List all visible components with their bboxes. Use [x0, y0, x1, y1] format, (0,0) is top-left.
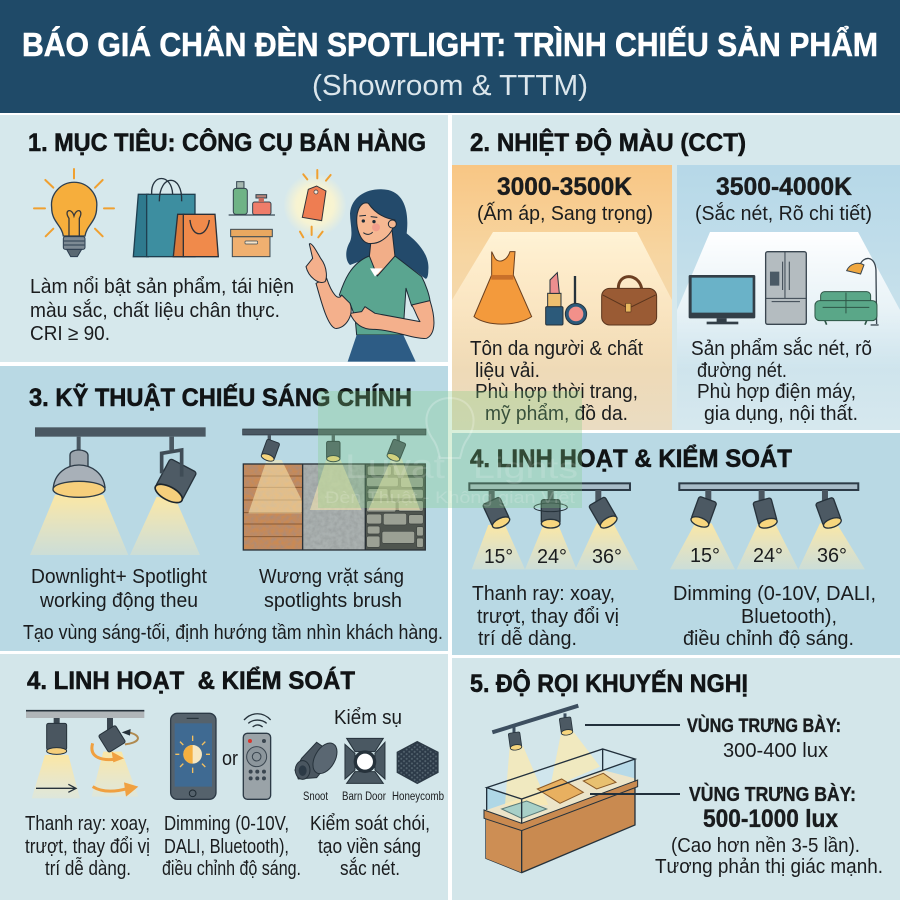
- beam angle labels: 15°: [484, 546, 513, 568]
- dimming text: [162, 813, 301, 880]
- cool description: [691, 337, 872, 425]
- glare control text: [310, 813, 430, 880]
- panel: 2 color temperature: [452, 115, 900, 430]
- panel: 1 goal: [0, 115, 448, 362]
- cool CCT label: [695, 173, 872, 225]
- goal description: CRI ≥ 90.: [30, 323, 110, 345]
- display zone label: 500-1000 lux: [703, 805, 838, 833]
- cool light cone: [677, 232, 900, 370]
- panel: 5 recommended illuminance: [452, 658, 900, 900]
- icon: honeycomb: [397, 742, 438, 783]
- warm CCT label: [477, 173, 653, 225]
- technique captions: spotlights brush: [264, 590, 402, 612]
- display zone label: Tương phản thị giác mạnh.: [655, 856, 883, 878]
- icons: TV, fridge, sofa and lamp: [689, 252, 879, 325]
- accessories heading: Kiểm sụ: [334, 707, 402, 729]
- display zone label: VÙNG TRƯNG BÀY:: [689, 782, 856, 806]
- warm description: Tôn da người & chất: [470, 338, 643, 360]
- icons: dress, lipstick, handbag: [474, 252, 657, 325]
- rail description: trí dễ dàng.: [478, 627, 577, 650]
- dimming text: Dimming (0-10V,: [164, 813, 289, 835]
- warm description: [470, 338, 643, 425]
- icon: light bulb: [34, 169, 114, 257]
- leader lines: [585, 725, 680, 794]
- icon: rail lamps with movement arrows: [26, 711, 144, 798]
- cool description: Sản phẩm sắc nét, rõ: [691, 337, 872, 360]
- general zone label: VÙNG TRƯNG BÀY:: [687, 715, 841, 737]
- dimming text: DALI, Bluetooth),: [164, 836, 289, 858]
- watermark: Đèn Thuật - Không gian Việt: [325, 488, 575, 507]
- technique captions: [31, 566, 404, 612]
- rail description: trượt, thay đổi vị: [477, 606, 619, 628]
- accessory labels: Snoot: [303, 791, 329, 803]
- accessory labels: Barn Door: [342, 791, 386, 803]
- goal description: [30, 276, 294, 345]
- accessory labels: [303, 791, 444, 803]
- glare control text: sắc nét.: [340, 857, 400, 880]
- heading 1: 1. MỤC TIÊU: CÔNG CỤ BÁN HÀNG: [28, 127, 426, 157]
- display zone label: [655, 782, 883, 878]
- or label: or: [222, 748, 238, 770]
- cool description: Phù hợp điện máy,: [697, 381, 856, 403]
- heading 5: 5. ĐỘ RỌI KHUYẾN NGHỊ: [470, 668, 748, 698]
- watermark: Luvat: [345, 448, 446, 486]
- glare control text: Kiểm soát chói,: [310, 813, 430, 835]
- technique captions: Wương vrặt sáng: [259, 566, 404, 588]
- dimming description: Dimming (0-10V, DALI,: [673, 583, 876, 605]
- icon: smartphone dimming: [171, 713, 216, 799]
- goal description: màu sắc, chất liệu chân thực.: [30, 299, 280, 322]
- icon: downlight and spotlight on rail: [30, 427, 206, 555]
- panel: 4 flexibility right: [452, 433, 900, 655]
- icon: snoot: [295, 739, 342, 779]
- beam angle labels: [484, 545, 847, 568]
- panel: 3 main lighting techniques: [0, 366, 448, 651]
- rail text: trượt, thay đổi vị: [25, 836, 150, 858]
- cool CCT label: 3500-4000K: [716, 173, 852, 201]
- warm description: mỹ phẩm, đồ da.: [485, 403, 628, 425]
- icon: rail spotlights right with beam angles: [670, 483, 865, 569]
- rail text: Thanh ray: xoay,: [25, 813, 150, 835]
- icon: woman pointing: [306, 189, 434, 362]
- beam angle labels: 36°: [592, 546, 622, 568]
- beam angle labels: 15°: [690, 545, 720, 567]
- warm light cone: [452, 232, 672, 370]
- technique captions: Downlight+ Spotlight: [31, 566, 207, 588]
- accessory labels: Honeycomb: [392, 791, 444, 803]
- cool description: gia dụng, nội thất.: [704, 403, 858, 425]
- dimming description: Bluetooth),: [741, 606, 837, 628]
- icon: shopping bags: [133, 178, 218, 257]
- rail description: Thanh ray: xoay,: [472, 583, 615, 605]
- beam angle labels: 36°: [817, 545, 847, 567]
- technique summary: Tạo vùng sáng-tối, định hướng tầm nhìn khách hàng.: [23, 622, 443, 644]
- icon: barn door: [345, 738, 385, 783]
- warm CCT label: 3000-3500K: [497, 173, 632, 201]
- icon: glowing price tag: [283, 170, 347, 237]
- watermark: Lights: [473, 452, 578, 485]
- icon: cosmetics on shelf and box: [229, 182, 275, 257]
- heading 3: 3. KỸ THUẬT CHIẾU SÁNG CHÍNH: [29, 382, 412, 412]
- glare control text: tạo viền sáng: [318, 836, 421, 858]
- technique captions: working động theu: [39, 590, 198, 612]
- heading 2: 2. NHIỆT ĐỘ MÀU (CCT): [470, 127, 746, 157]
- beam angle labels: 24°: [537, 546, 567, 568]
- icon: wall washing on wood, concrete and stone: [243, 429, 426, 550]
- icon: remote control: [243, 714, 271, 799]
- watermark: [318, 391, 582, 508]
- subtitle: (Showroom & TTTM): [312, 70, 588, 102]
- header banner: [0, 0, 900, 113]
- panel: 4 flexibility bottom: [0, 654, 448, 900]
- dimming description: điều chỉnh độ sáng.: [683, 628, 854, 650]
- warm column background: [452, 165, 672, 430]
- icon: display case under track lights: [484, 706, 638, 873]
- warm description: liệu vải.: [475, 360, 540, 382]
- general zone label: 300-400 lux: [723, 740, 828, 762]
- cool description: đường nét.: [697, 360, 787, 382]
- rail description: [472, 583, 619, 650]
- beam angle labels: 24°: [753, 545, 783, 567]
- dimming description: [673, 583, 876, 650]
- goal description: Làm nổi bật sản phẩm, tái hiện: [30, 276, 294, 298]
- general zone label: [687, 715, 841, 762]
- warm description: Phù hợp thời trang,: [475, 381, 638, 403]
- heading 4 bottom: 4. LINH HOẠT & KIỂM SOÁT: [27, 666, 355, 695]
- rail text: [25, 813, 150, 880]
- dimming text: điều chỉnh độ sáng.: [162, 858, 301, 880]
- cool CCT label: (Sắc nét, Rõ chi tiết): [695, 202, 872, 225]
- icon: rail spotlights left with beam angles: [469, 483, 638, 570]
- warm CCT label: (Ấm áp, Sang trọng): [477, 202, 653, 225]
- heading 4 right: 4. LINH HOẠT & KIỂM SOÁT: [470, 444, 792, 473]
- display zone label: (Cao hơn nền 3-5 lần).: [671, 835, 860, 857]
- cool column background: [677, 165, 900, 430]
- rail text: trí dễ dàng.: [45, 857, 131, 880]
